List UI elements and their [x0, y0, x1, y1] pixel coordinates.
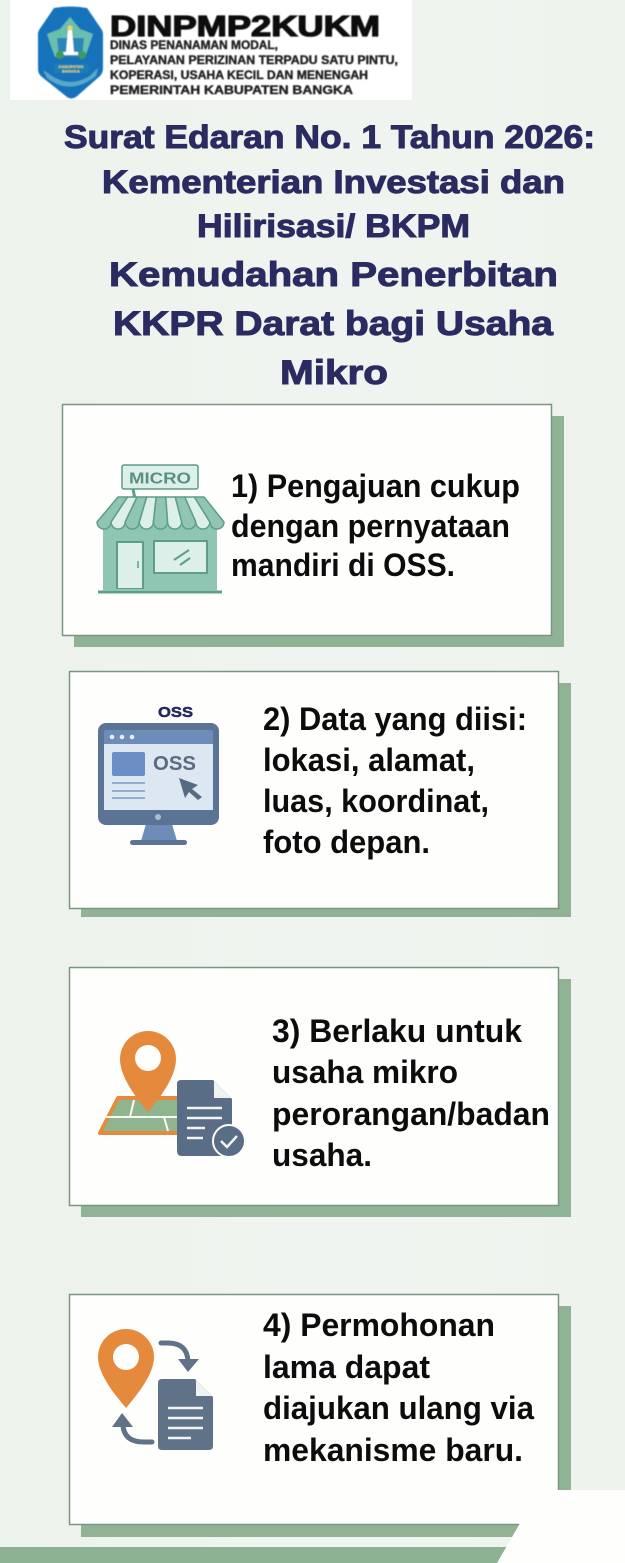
panel: step 1 [62, 404, 564, 647]
step 4 text [263, 1307, 534, 1468]
title [64, 119, 595, 392]
icon: map pin and document exchange [98, 1329, 213, 1450]
logo agency name: KOPERASI, USAHA KECIL DAN MENENGAH [110, 68, 368, 82]
logo agency name [110, 38, 398, 97]
step 2 text: luas, koordinat, [263, 783, 489, 819]
title: Kemudahan Penerbitan [109, 256, 558, 294]
step 3 text: 3) Berlaku untuk [272, 1013, 522, 1049]
step 1 text: mandiri di OSS. [231, 547, 455, 583]
panel: step 2 [70, 672, 571, 917]
step 1 text: 1) Pengajuan cukup [231, 468, 520, 504]
icon: monitor with OSS portal [98, 723, 219, 845]
step 2 text: 2) Data yang diisi: [263, 701, 527, 737]
panel: step 4 [70, 1294, 571, 1537]
title: Kementerian Investasi dan [102, 164, 565, 200]
step 2 text: lokasi, alamat, [263, 742, 475, 778]
step 4 text: diajukan ulang via [263, 1390, 534, 1426]
white corner shape [497, 1490, 625, 1563]
icon: monitor with OSS portal: OSS [153, 753, 196, 775]
icon: Bangka regency shield [38, 6, 103, 98]
logo agency name: PEMERINTAH KABUPATEN BANGKA [110, 83, 353, 97]
icon: map pin and approved document [100, 1031, 245, 1157]
panel: step 3 [70, 968, 571, 1217]
step 3 text: perorangan/badan [272, 1096, 550, 1132]
step 4 text: mekanisme baru. [263, 1432, 523, 1468]
title: Mikro [280, 354, 388, 392]
icon: Bangka regency shield: KABUPATEN [59, 64, 83, 69]
step 3 text: usaha. [272, 1137, 372, 1173]
title: Hilirisasi/ BKPM [197, 208, 470, 244]
step 3 text [272, 1013, 550, 1173]
icon: micro shop [97, 465, 224, 592]
title: KKPR Darat bagi Usaha [113, 305, 554, 343]
icon: micro shop: MICRO [129, 470, 191, 488]
step 2 text: foto depan. [263, 824, 430, 860]
OSS label: OSS [158, 704, 193, 721]
step 4 text: 4) Permohonan [263, 1307, 495, 1343]
logo agency name: PELAYANAN PERIZINAN TERPADU SATU PINTU, [110, 53, 398, 67]
step 1 text: dengan pernyataan [231, 508, 510, 544]
bottom band [0, 1547, 625, 1563]
logo wordmark: DINPMP2KUKM [110, 11, 380, 43]
title: Surat Edaran No. 1 Tahun 2026: [64, 119, 595, 155]
logo agency name: DINAS PENANAMAN MODAL, [110, 38, 278, 52]
step 3 text: usaha mikro [272, 1054, 458, 1090]
logo banner [10, 0, 412, 100]
step 1 text [231, 468, 520, 583]
step 2 text [263, 701, 527, 860]
step 4 text: lama dapat [263, 1349, 430, 1385]
icon: Bangka regency shield: BANGKA [62, 68, 80, 74]
